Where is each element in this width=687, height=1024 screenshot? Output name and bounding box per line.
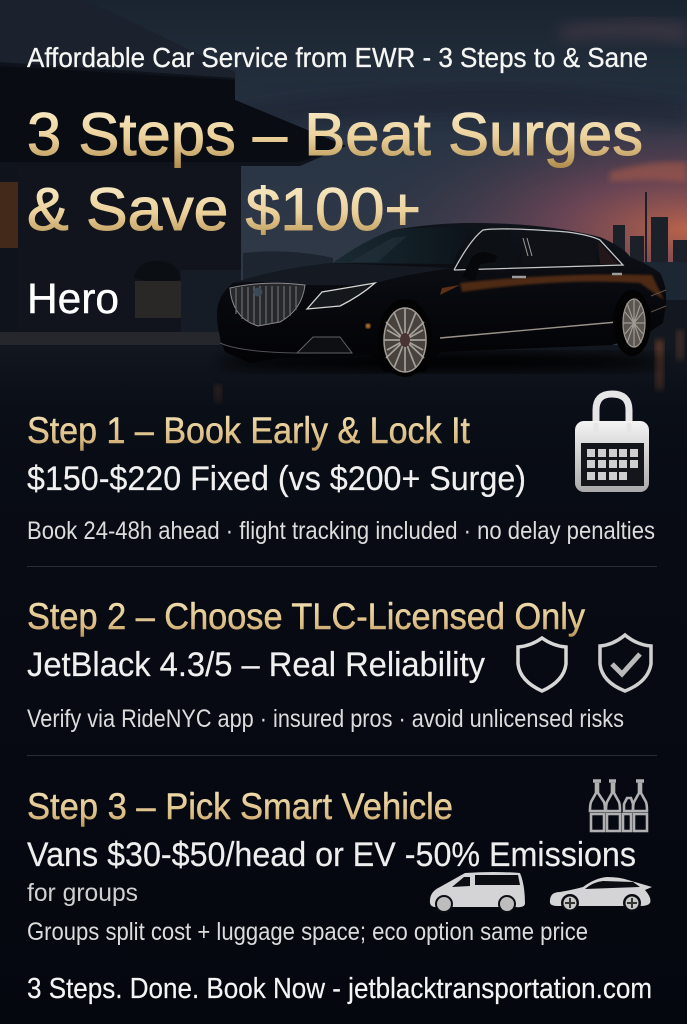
- wet road: [0, 300, 687, 465]
- hero background: dusk sky: [0, 0, 687, 345]
- body reflection: [460, 274, 664, 300]
- front wheel: [378, 299, 432, 377]
- panel: step 2: Step 2 – Choose TLC-Licensed Only: [27, 596, 585, 637]
- subtitle: Affordable Car Service from EWR - 3 Steps to & Sane: [27, 42, 648, 73]
- windshield: [333, 227, 473, 264]
- lower dark panel: [0, 350, 687, 1024]
- panel: step 2: JetBlack 4.3/5 – Real Reliability: [27, 646, 485, 684]
- hood: [233, 263, 453, 285]
- bumper intake: [297, 337, 352, 353]
- icon: shield outline: [518, 638, 566, 691]
- icon: electric car: [550, 877, 652, 912]
- mirror: [462, 252, 497, 282]
- planter: [134, 261, 181, 318]
- icon: calendar with padlock: [575, 394, 649, 492]
- door handles: [512, 274, 622, 277]
- main title: 3 Steps – Beat Surges: [27, 101, 643, 168]
- icon: shield with check: [600, 635, 651, 691]
- panel: step 3: [27, 781, 652, 946]
- panel: step 3: Vans $30-$50/head or EV -50% Emissions: [27, 836, 636, 874]
- panel: step 3: for groups: [27, 879, 138, 907]
- panel: step 1: $150-$220 Fixed (vs $200+ Surge): [27, 460, 526, 498]
- front grille: [230, 283, 305, 326]
- headlight: [307, 283, 375, 309]
- main title: [27, 101, 643, 243]
- hero background: terminal building: [0, 0, 346, 346]
- panel: step 3: Groups split cost + luggage space; eco option same price: [27, 918, 588, 946]
- side windows: [460, 231, 517, 268]
- icon: bottles and luggage: [590, 781, 647, 831]
- hero label: Hero: [27, 275, 119, 323]
- rear wheel: [613, 290, 651, 356]
- hero car: black limousine: [215, 223, 666, 377]
- panel: step 1: Step 1 – Book Early & Lock It: [27, 410, 471, 451]
- icon: van: [430, 872, 525, 913]
- city skyline: [613, 192, 687, 302]
- panel: step 2: [27, 596, 651, 733]
- panel: step 3: Step 3 – Pick Smart Vehicle: [27, 786, 453, 827]
- main title: & Save $100+: [27, 176, 421, 243]
- panel: step 1: [27, 394, 655, 545]
